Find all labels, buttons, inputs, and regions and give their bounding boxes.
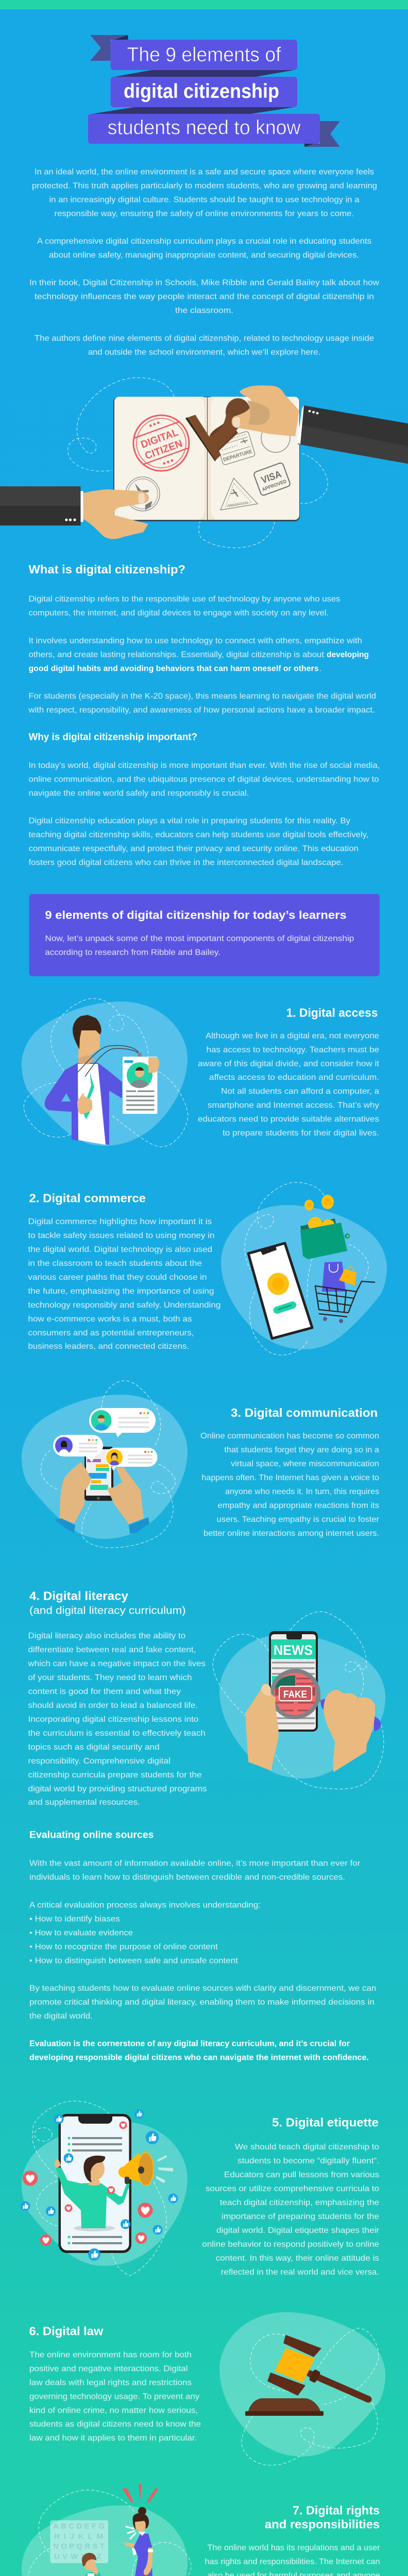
text block: reflected in the real world and vice versa. bbox=[221, 2268, 379, 2277]
icon: magnifier with fake label: FAKE bbox=[283, 1689, 307, 1700]
heading: 3. Digital communication bbox=[231, 1406, 378, 1419]
heading: 7. Digital rights bbox=[293, 2504, 380, 2517]
text block bbox=[198, 1032, 380, 1138]
intro text block: The authors define nine elements of digital citizenship, related to technology usage inside bbox=[35, 334, 374, 343]
text block: citizenship curricula prepare students for the bbox=[28, 1771, 202, 1780]
alphabet chart: ABCDEFG bbox=[53, 2522, 105, 2531]
text block: importance of preparing students for the bbox=[222, 2212, 379, 2221]
text block: sources or utilize comprehensive curricula to bbox=[206, 2184, 379, 2193]
text block: content. In this way, their online attitude is bbox=[216, 2254, 379, 2263]
text block: users. Teaching empathy is crucial to foster bbox=[217, 1515, 380, 1524]
text block: topics such as digital security and bbox=[28, 1743, 160, 1752]
intro text block: and outside the school environment, which we’ll explore here. bbox=[88, 348, 320, 357]
stamp: digital citizen bbox=[126, 408, 197, 479]
stamp: visa approved bbox=[253, 462, 291, 496]
alphabet chart: HIJKLM bbox=[54, 2532, 103, 2541]
text block: educators need to provide suitable alternatives bbox=[198, 1115, 379, 1124]
stamp: airplane circle bbox=[126, 477, 160, 511]
text block: empathy and appropriate reactions from its bbox=[218, 1501, 379, 1510]
text block: importance bbox=[29, 761, 380, 867]
illustration: fake news on phone with magnifier bbox=[213, 1612, 385, 1789]
text block: Online communication has become so common bbox=[200, 1432, 379, 1440]
text block: should avoid in order to lead a balanced life. bbox=[28, 1701, 198, 1710]
stamp: departure: DEPARTURE bbox=[223, 449, 253, 463]
text block: in the classroom to teach students about the bbox=[28, 1259, 202, 1268]
intro text block: about online safety, managing inappropriate content, and securing digital devices. bbox=[49, 251, 359, 260]
text block: definition: computers, the internet, and digital devices to engage with society on any level. bbox=[29, 609, 329, 618]
text block: anyone who needs it. In turn, this requires bbox=[225, 1487, 379, 1496]
heading: 1. Digital access bbox=[286, 1006, 378, 1019]
text block: Educators can pull lessons from various bbox=[224, 2171, 379, 2179]
text block: students as digital citizens need to know the bbox=[29, 2420, 201, 2429]
intro text block: In their book, Digital Citizenship in Schools, Mike Ribble and Gerald Bailey talk about how bbox=[29, 279, 379, 287]
text block: definition: others, and create lasting relationships. Essentially, digital citizenship is about bbox=[29, 650, 325, 659]
text block: importance: Digital citizenship education plays a vital role in preparing students for this reality. By bbox=[29, 817, 350, 825]
text block: differentiate between real and fake content, bbox=[28, 1646, 196, 1654]
top green band bbox=[0, 0, 408, 9]
intro text block bbox=[29, 167, 379, 357]
stamp: immigration triangle: IMMIGRATION bbox=[227, 501, 248, 508]
intro text block: A comprehensive digital citizenship curriculum plays a crucial role in educating students bbox=[37, 237, 371, 246]
text block: which can have a negative impact on the lives bbox=[27, 1659, 206, 1668]
text block: definition: developing bbox=[327, 650, 369, 659]
panel: 9 elements callout: Now, let’s unpack some of the most important components of digital citizenship bbox=[45, 934, 354, 943]
student at desk bbox=[56, 2553, 125, 2576]
text block bbox=[29, 2350, 201, 2443]
illustration: hands holding phone with chat bubbles bbox=[22, 1381, 188, 1548]
stamp: visa approved: APPROVED bbox=[261, 479, 287, 493]
text block: technology responsibly and safely. Understanding bbox=[28, 1301, 220, 1310]
text block: happens often. The Internet has given a voice to bbox=[201, 1473, 379, 1482]
text block: importance: communicate respectfully, and protect their privacy and security online. This education bbox=[29, 844, 359, 853]
text block: Digital commerce highlights how important it is bbox=[28, 1217, 212, 1226]
intro text block: technology influences the way people interact and the concept of digital citizenship in bbox=[35, 293, 374, 301]
panel: 6. digital law bbox=[29, 2312, 385, 2465]
text block: and supplemental resources. bbox=[28, 1798, 140, 1807]
text block: The online world has its regulations and a user bbox=[207, 2544, 380, 2552]
text block: evaluating online sources bbox=[29, 1859, 376, 2062]
panel: 9 elements callout: 9 elements of digital citizenship for today’s learners bbox=[45, 908, 347, 921]
text block: definition: For students (especially in the K-20 space), this means learning to navigate the digital world bbox=[29, 692, 376, 701]
title ribbon: digital citizenship bbox=[124, 80, 279, 103]
text block: students to become “digitally fluent”. bbox=[237, 2157, 379, 2165]
text block: importance: In today’s world, digital citizenship is more important than ever. With the rise of social media, bbox=[29, 761, 380, 770]
illustration: passport being stamped bbox=[0, 378, 408, 548]
icon: rubber stamp tool bbox=[185, 398, 250, 461]
text block: governing technology usage. To prevent any bbox=[29, 2392, 199, 2401]
text block: the digital world. Digital technology is also used bbox=[28, 1245, 212, 1254]
chat bubble: right bbox=[105, 1448, 158, 1471]
heading: and responsibilities bbox=[265, 2518, 380, 2531]
text block: evaluating online sources: By teaching students how to evaluate online sources with clarity and discernment, we can bbox=[29, 1984, 376, 1993]
text block: to tackle safety issues related to using money in bbox=[28, 1231, 214, 1240]
text block: aware of this digital divide, and consider how it bbox=[198, 1060, 380, 1069]
text block: positive and negative interactions. Digital bbox=[29, 2364, 188, 2373]
intro text block: in an increasingly digital culture. Students should be taught to use technology in a bbox=[49, 195, 360, 204]
title ribbon bbox=[88, 35, 340, 147]
intro text block: protected. This truth applies particularly to modern students, who are growing and learning bbox=[32, 181, 377, 190]
text block: responsibility. Comprehensive digital bbox=[28, 1757, 171, 1766]
intro text block: responsible way, ensuring the safety of online environments for years to come. bbox=[55, 209, 354, 218]
text block: smartphone and Internet access. That’s why bbox=[208, 1101, 379, 1110]
teacher bbox=[123, 2507, 154, 2576]
heading: (and digital literacy curriculum) bbox=[29, 1605, 186, 1617]
text block: evaluating online sources: developing responsible digital citizens who can navigate the internet with confidence. bbox=[29, 2054, 369, 2062]
text block: business leaders, and connected citizens. bbox=[28, 1342, 189, 1351]
text block: definition: Digital citizenship refers to the responsible use of technology by anyone who uses bbox=[29, 595, 340, 604]
alphabet chart bbox=[50, 2520, 108, 2563]
panel: 5. digital etiquette bbox=[21, 2101, 380, 2277]
text block: how e-commerce works is a must, both as bbox=[28, 1315, 192, 1324]
illustration: teacher with ID badge bbox=[22, 998, 188, 1147]
icon: left hand with sleeve bbox=[0, 486, 149, 539]
panel: 1. digital access bbox=[22, 998, 380, 1147]
panel: 3. digital communication bbox=[22, 1381, 380, 1548]
text block: kind of online crime, no matter how serious, bbox=[29, 2406, 198, 2415]
text block: affects access to education and curriculum. bbox=[209, 1073, 379, 1082]
text block: better online interactions among internet users. bbox=[203, 1529, 379, 1538]
illustration: gavel bbox=[219, 2312, 385, 2465]
text block: law and how it applies to them in particular. bbox=[29, 2434, 197, 2443]
text block bbox=[28, 1217, 220, 1351]
text block: virtual space, where miscommunication bbox=[231, 1460, 379, 1468]
stamp: digital citizen: DIGITAL bbox=[139, 427, 180, 451]
text block: the curriculum is essential to effectively teach bbox=[28, 1729, 206, 1738]
alphabet chart: UVWXYZ bbox=[54, 2552, 101, 2561]
heading: evaluating online sources: Evaluating online sources bbox=[29, 1830, 154, 1841]
text block: definition: good digital habits and avoiding behaviors that can harm oneself or others bbox=[29, 664, 319, 673]
stamp: immigration triangle bbox=[220, 478, 258, 510]
illustration: fake news on phone with magnifier: NEWS bbox=[274, 1642, 313, 1658]
text block: digital world. Digital etiquette shapes their bbox=[216, 2226, 380, 2235]
text block: evaluating online sources: Evaluation is the cornerstone of any digital literacy curriculum, and it’s crucial for bbox=[29, 2040, 350, 2048]
text block: teach digital citizenship, emphasizing the bbox=[220, 2198, 379, 2207]
heading: 5. Digital etiquette bbox=[272, 2115, 379, 2129]
heading: 4. Digital literacy bbox=[29, 1589, 128, 1603]
heading bbox=[265, 2504, 380, 2531]
text block: We should teach digital citizenship to bbox=[235, 2143, 379, 2151]
stamp: digital citizen: CITIZEN bbox=[143, 438, 184, 462]
intro text block: the classroom. bbox=[175, 307, 233, 315]
panel: 4. digital literacy bbox=[27, 1589, 385, 1807]
stamp: visa approved: VISA bbox=[260, 469, 283, 486]
text block: definition: with respect, responsibility, and awareness of how personal actions have a broader impact. bbox=[28, 706, 375, 715]
text block: evaluating online sources: individuals to learn how to distinguish between credible and non-credible sources. bbox=[29, 1873, 345, 1882]
text block bbox=[205, 2544, 380, 2576]
text block: Digital literacy also includes the ability to bbox=[28, 1632, 185, 1640]
text block: evaluating online sources: • How to identify biases bbox=[29, 1914, 120, 1923]
text block bbox=[200, 1432, 380, 1538]
illustration: phone, wallet and cart bbox=[221, 1182, 387, 1355]
text block: Although we live in a digital era, not everyone bbox=[206, 1032, 379, 1041]
heading: 2. Digital commerce bbox=[29, 1191, 146, 1205]
text block: the future, emphasizing the importance of using bbox=[28, 1287, 214, 1296]
icon: megaphone bbox=[118, 2153, 154, 2185]
text block: evaluating online sources: • How to recognize the purpose of online content bbox=[29, 1942, 218, 1951]
text block: definition: It involves understanding how to use technology to connect with others, empathize with bbox=[29, 636, 362, 645]
panel: 9 elements callout: according to research from Ribble and Bailey. bbox=[45, 948, 220, 957]
icons: hearts bbox=[23, 2122, 153, 2246]
icon: right hand with sleeve bbox=[232, 385, 408, 464]
text block: definition bbox=[28, 595, 376, 715]
text block: content is good for them and what they bbox=[28, 1687, 181, 1696]
heading: what is digital citizenship: What is digital citizenship? bbox=[29, 563, 185, 576]
icons: likes bbox=[21, 2109, 178, 2261]
text block bbox=[27, 1632, 207, 1807]
intro text block: In an ideal world, the online environment is a safe and secure space where everyone feels bbox=[35, 167, 374, 176]
text block: importance: teaching digital citizenship skills, educators can help students use digital tools effectively, bbox=[29, 831, 369, 839]
panel: 2. digital commerce bbox=[28, 1182, 387, 1355]
text block: definition: . bbox=[319, 664, 321, 673]
text block: importance: online communication, and the ubiquitous presence of digital devices, understanding how to bbox=[29, 775, 379, 784]
text block: Incorporating digital citizenship lessons into bbox=[28, 1715, 199, 1724]
text block: evaluating online sources: A critical evaluation process always involves understanding: bbox=[29, 1901, 261, 1909]
text block: that students forget they are doing so in a bbox=[224, 1446, 379, 1454]
heading: 6. Digital law bbox=[29, 2324, 104, 2337]
chat bubble: top bbox=[89, 1408, 156, 1437]
text block: evaluating online sources: With the vast amount of information available online, it’s more important than ever for bbox=[29, 1859, 361, 1868]
heading bbox=[29, 1589, 186, 1617]
text block: digital world by providing structured programs bbox=[28, 1785, 207, 1793]
text block: evaluating online sources: the digital world. bbox=[29, 2012, 93, 2021]
text block: evaluating online sources: • How to evaluate evidence bbox=[29, 1928, 133, 1937]
text block: importance: navigate the online world safely and responsibly is crucial. bbox=[29, 789, 249, 798]
text block bbox=[202, 2143, 380, 2277]
alphabet chart: NOPQRST bbox=[53, 2542, 105, 2551]
text block: to prepare students for their digital lives. bbox=[223, 1129, 379, 1138]
text block: has rights and responsibilities. The Internet can bbox=[205, 2557, 380, 2566]
chat bubble: left bbox=[53, 1435, 103, 1462]
illustration: person with megaphone on phone bbox=[21, 2101, 188, 2276]
text block: Not all students can afford a computer, a bbox=[221, 1087, 379, 1096]
text block: law deals with legal rights and restrictions bbox=[29, 2378, 192, 2387]
text block: has access to technology. Teachers must be bbox=[206, 1046, 379, 1055]
text block: The online environment has room for both bbox=[29, 2350, 192, 2359]
panel: 7. digital rights and responsibilities bbox=[22, 2484, 380, 2576]
text block: online behavior to respond positively to online bbox=[202, 2240, 379, 2249]
title ribbon: The 9 elements of bbox=[127, 44, 281, 66]
text block: various career paths that they could choose in bbox=[28, 1273, 207, 1282]
text block: evaluating online sources: • How to distinguish between safe and unsafe content bbox=[29, 1956, 239, 1965]
panel: 9 elements callout bbox=[29, 894, 380, 976]
illustration: teacher scolding student bbox=[22, 2484, 191, 2576]
text block: importance: fosters good digital citizens who can thrive in the interconnected digital landscape. bbox=[29, 858, 343, 867]
stamp: departure bbox=[216, 431, 256, 465]
text block: consumers and as potential entrepreneurs, bbox=[28, 1329, 194, 1337]
icon: magnifier with fake label bbox=[272, 1671, 381, 1731]
heading: why is digital citizenship important: Why is digital citizenship important? bbox=[29, 732, 197, 743]
text block: of your students. They need to learn which bbox=[28, 1673, 192, 1682]
title ribbon: students need to know bbox=[108, 117, 301, 139]
text block: evaluating online sources: promote critical thinking and digital literacy, enabling them to make informed decisions in bbox=[29, 1998, 375, 2007]
